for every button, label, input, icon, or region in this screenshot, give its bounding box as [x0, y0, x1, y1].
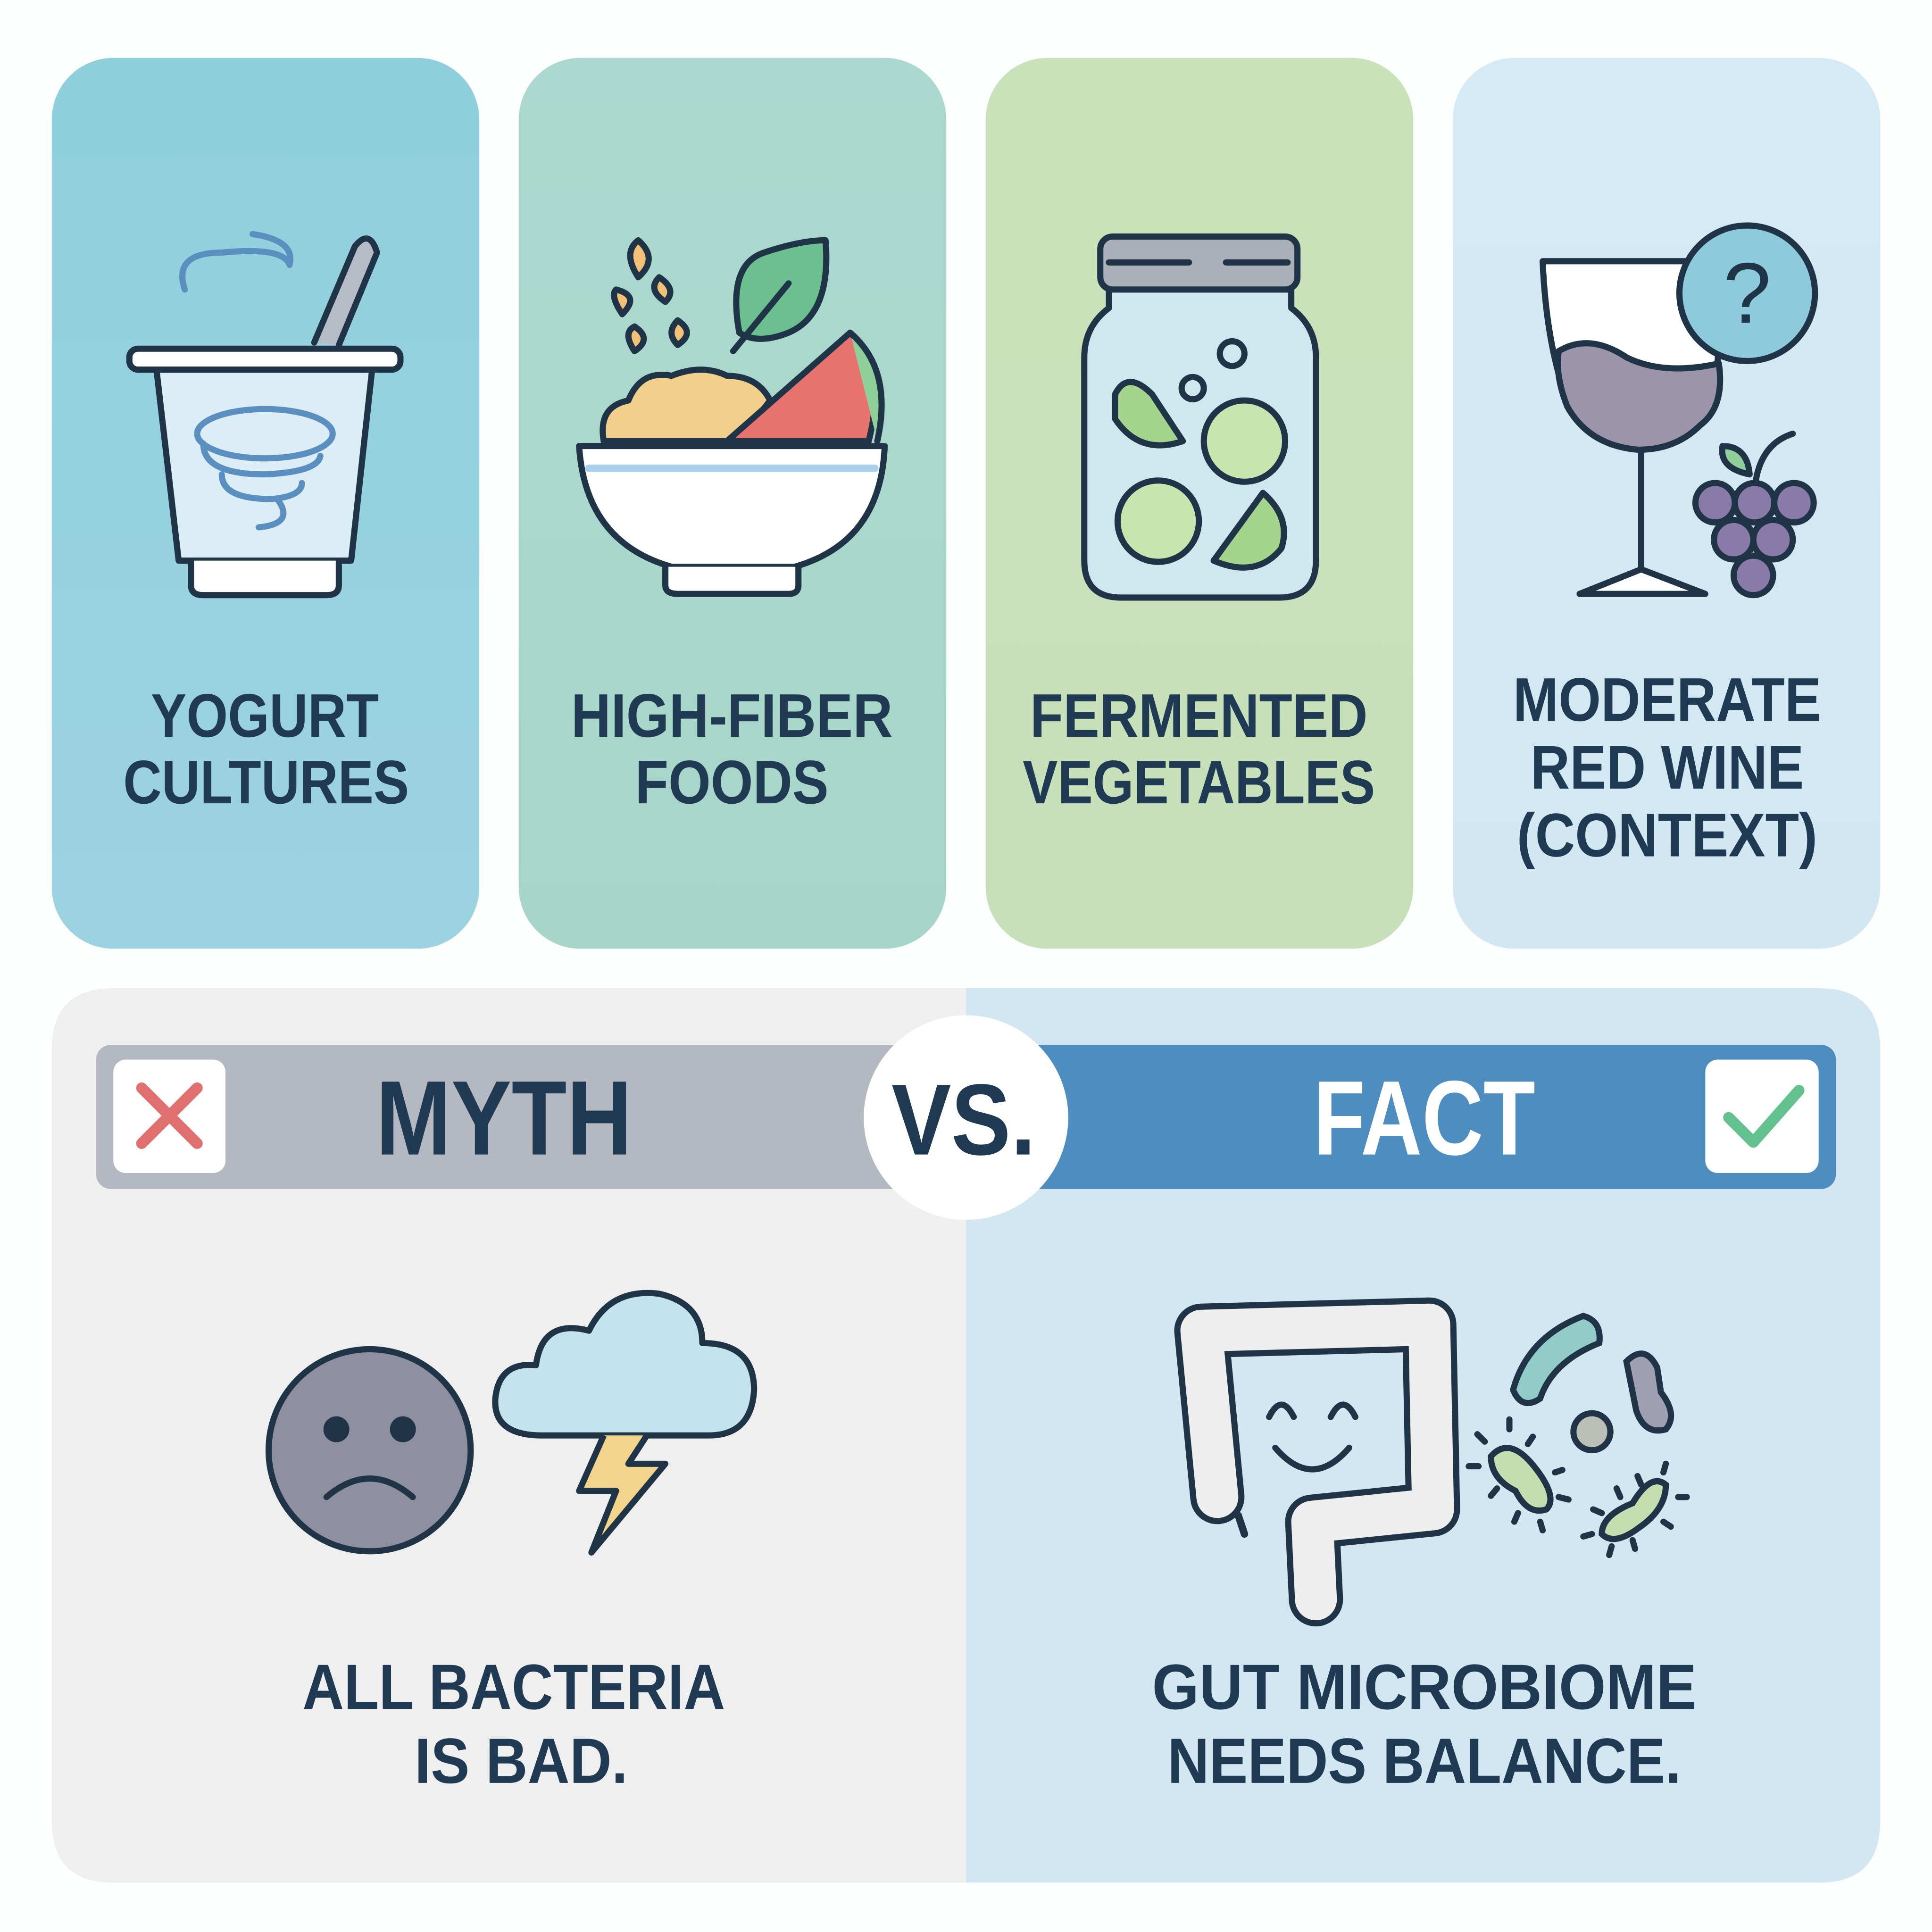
- myth text: ALL BACTERIA: [302, 1651, 725, 1723]
- myth bar: MYTH: [376, 1059, 632, 1177]
- icon: sad face: [268, 1349, 471, 1551]
- fact text: NEEDS BALANCE.: [1167, 1725, 1681, 1797]
- fact bar: [998, 1045, 1836, 1189]
- icon: wine glass: ?: [1723, 244, 1771, 341]
- card: yogurt cultures: [52, 58, 479, 949]
- myth text: IS BAD.: [415, 1725, 628, 1797]
- icon: salad bowl: [579, 240, 885, 594]
- icon: bacteria: [1469, 1316, 1687, 1555]
- card: high-fiber foods: FOODS: [635, 748, 829, 816]
- card: fermented vegetables: VEGETABLES: [1023, 748, 1375, 816]
- card: yogurt cultures: CULTURES: [123, 748, 409, 816]
- vs badge: [864, 1015, 1068, 1220]
- card: moderate red wine: RED WINE: [1530, 733, 1804, 802]
- icon: yogurt cup: [129, 234, 400, 595]
- icon: storm cloud: [495, 1293, 754, 1552]
- panel: myth vs fact: [52, 988, 1880, 1883]
- label: yogurt cultures: YOGURT: [151, 681, 379, 750]
- vs badge: VS.: [891, 1064, 1036, 1176]
- icon: wine glass: [1543, 225, 1815, 595]
- card: moderate red wine: (CONTEXT): [1517, 801, 1817, 870]
- myth text: [302, 1651, 725, 1797]
- icon: gut intestine: [1201, 1324, 1433, 1599]
- icon: jar: [1084, 237, 1316, 598]
- label: high-fiber foods: HIGH-FIBER: [571, 681, 893, 750]
- label: fermented vegetables: FERMENTED: [1030, 681, 1368, 750]
- label: moderate red wine (context): MODERATE: [1513, 665, 1821, 734]
- card: high-fiber foods: [519, 58, 946, 949]
- card: fermented vegetables: [986, 58, 1413, 949]
- myth bar: [96, 1045, 934, 1189]
- card: moderate red wine: [1453, 58, 1880, 949]
- fact bar: FACT: [1314, 1059, 1535, 1177]
- fact text: GUT MICROBIOME: [1152, 1651, 1697, 1723]
- fact text: [1152, 1651, 1697, 1797]
